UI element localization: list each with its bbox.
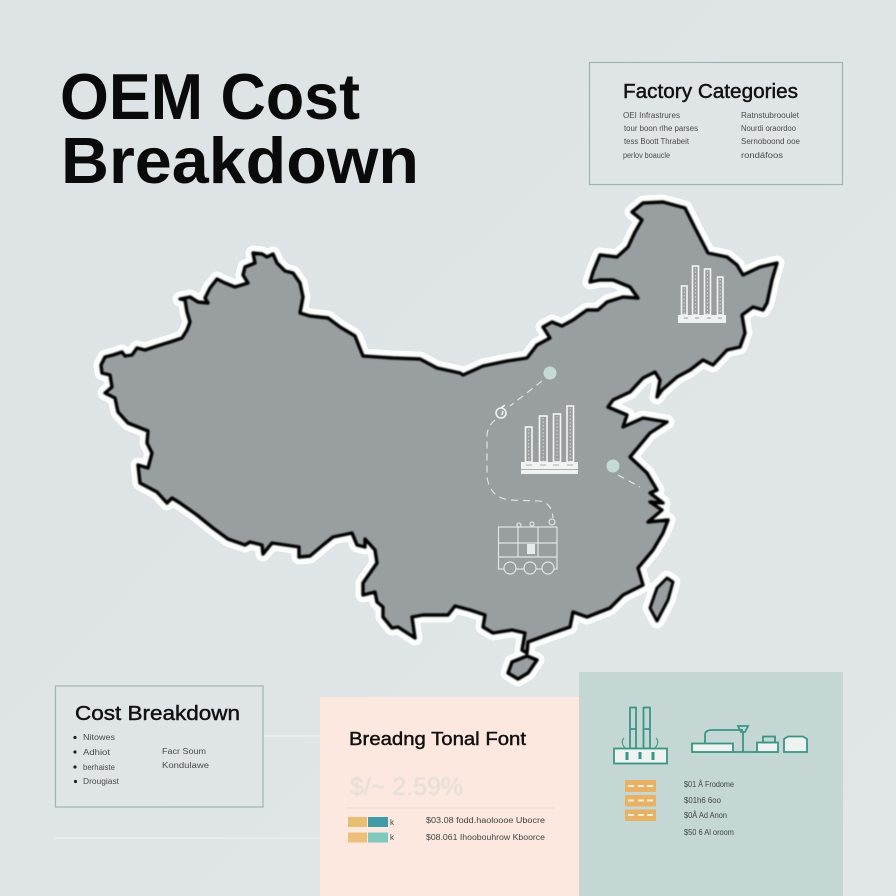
- panel: tonal font: k: [390, 833, 395, 842]
- panel: factory categories: tess Boott Thrabeit: [624, 137, 690, 146]
- panel: tonal font: k: [390, 818, 395, 827]
- connector lines: [55, 736, 320, 838]
- bar chart legend: [348, 817, 388, 842]
- panel: tonal font: $08.061 Ihoobouhrow Kboorce: [426, 833, 546, 842]
- panel: teal factories: [579, 672, 843, 896]
- panel: factory categories: tour boon rlhe parses: [624, 124, 698, 133]
- title: OEM Cost: [60, 60, 360, 133]
- panel: factory categories: Ratnstubrooulet: [741, 111, 800, 120]
- icon: teal machinery: [692, 726, 807, 752]
- panel: factory categories: perlov boaucle: [623, 151, 670, 160]
- panel: teal factories: $01h6 6oo: [684, 796, 722, 805]
- icon: factory machine: [498, 519, 557, 574]
- panel: cost breakdown: Nitowes: [83, 733, 115, 742]
- panel: factory categories: OEI Infrastrures: [623, 111, 680, 120]
- panel: cost breakdown: Facr Soum: [162, 747, 206, 756]
- panel: teal factories: $01 Å Frodome: [684, 780, 734, 789]
- icon: orange server stack: [625, 780, 656, 821]
- panel: cost breakdown: berhaiste: [83, 763, 116, 772]
- title: Breakdown: [61, 124, 419, 197]
- panel: cost breakdown: [56, 686, 263, 807]
- panel: cost breakdown: Adhiot: [83, 748, 111, 757]
- panel: tonal font: [320, 697, 579, 896]
- panel: tonal font: Breadng Tonal Font: [349, 728, 526, 749]
- panel: tonal font: $03.08 fodd.haoloooe Ubocre: [426, 816, 546, 825]
- panel: factory categories: Factory Categories: [623, 81, 798, 103]
- panel: cost breakdown: Kondulawe: [162, 761, 210, 770]
- panel: factory categories: [590, 62, 842, 184]
- panel: teal factories: $0Å Ad Anon: [684, 811, 727, 820]
- icon: central factory: [521, 406, 578, 474]
- route lines: [487, 381, 640, 518]
- panel: factory categories: Nourdi oraordoo: [741, 124, 797, 133]
- icon: location ring: [496, 405, 506, 418]
- panel: teal factories: $50 6 Al oroom: [684, 828, 734, 837]
- panel: cost breakdown: Drougiast: [83, 777, 120, 786]
- panel: cost breakdown: Cost Breakdown: [75, 703, 240, 725]
- icon: teal factory: [614, 708, 667, 764]
- panel: factory categories: Sernoboond ooe: [741, 137, 801, 146]
- marker dots: [544, 366, 620, 472]
- map of China: [101, 202, 777, 679]
- title: [60, 60, 419, 197]
- icon: northeast factory: [678, 266, 726, 323]
- panel: factory categories: rondáfoos: [741, 151, 783, 160]
- panel: tonal font: $/~ 2.59%: [350, 773, 463, 801]
